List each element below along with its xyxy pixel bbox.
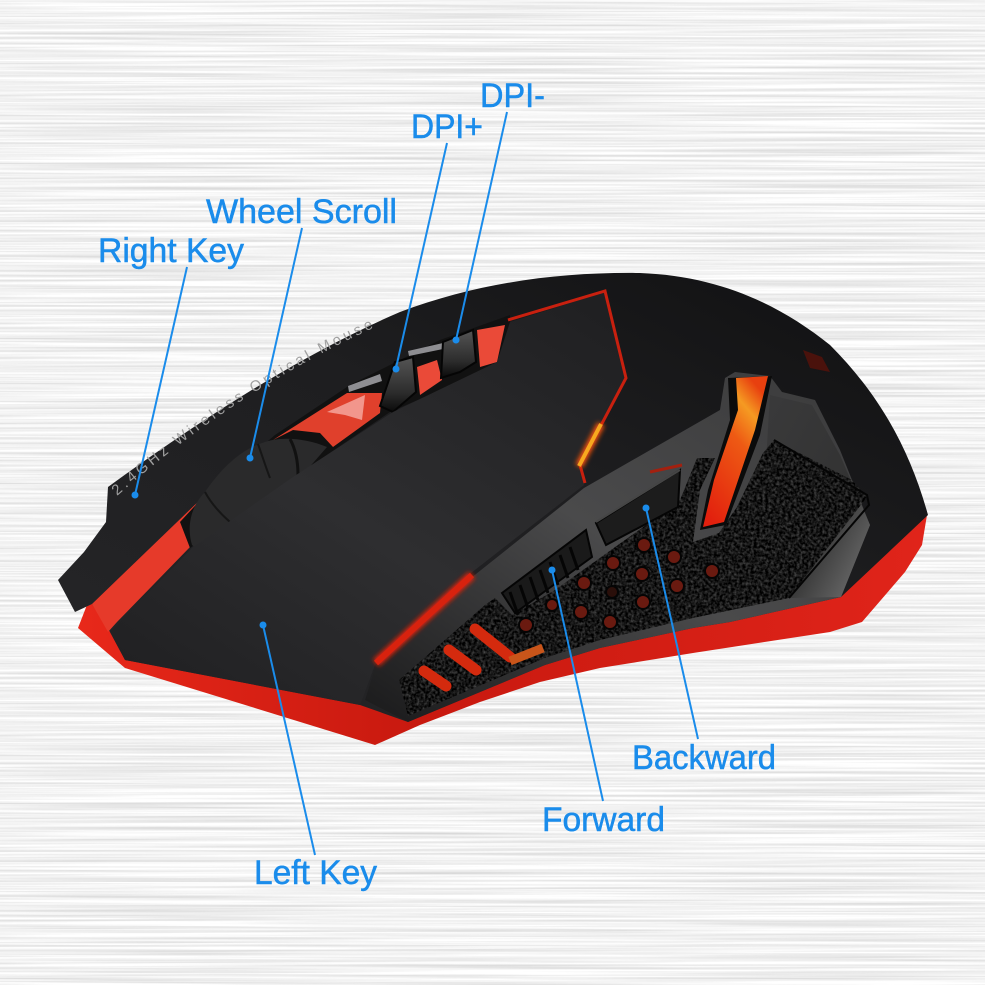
red between buttons 2	[477, 325, 505, 367]
mouse illustration	[58, 272, 928, 745]
backward button	[596, 465, 682, 545]
scroll wheel	[190, 439, 327, 550]
DPI- cap	[408, 343, 443, 356]
red between buttons 1	[417, 360, 442, 395]
callout: Wheel Scroll: Wheel Scroll	[206, 193, 397, 231]
red highlight	[327, 395, 365, 420]
DPI- button	[441, 330, 476, 378]
red front strip	[92, 497, 203, 632]
grip holes	[519, 538, 719, 632]
main LED bar	[703, 376, 768, 527]
red seam	[508, 291, 626, 483]
callout: Forward	[542, 566, 665, 839]
red base	[78, 515, 927, 745]
left key panel	[110, 292, 626, 705]
callout: Wheel Scroll	[206, 193, 397, 462]
DPI+ button	[380, 357, 416, 412]
side LED bars	[424, 629, 543, 686]
callout: Left Key	[254, 622, 377, 892]
forward button	[502, 530, 592, 615]
right grey panel	[760, 395, 870, 598]
callout: Right Key: Right Key	[98, 232, 244, 270]
callout: Left Key: Left Key	[254, 854, 377, 892]
LED bar bezel	[700, 376, 772, 530]
black inner channel	[180, 315, 510, 548]
black body	[58, 273, 928, 722]
red channel behind wheel	[273, 393, 382, 447]
logo mark	[803, 350, 830, 372]
red LED strip	[376, 575, 472, 663]
callout: Right Key	[98, 232, 244, 498]
callout: DPI+: DPI+	[411, 108, 483, 146]
seam glow	[579, 424, 601, 466]
callout: Forward: Forward	[542, 801, 665, 839]
textured side grip	[399, 440, 867, 716]
callout: Backward: Backward	[632, 739, 776, 777]
grip outline	[774, 440, 869, 598]
glossy side band	[365, 372, 870, 722]
DPI+ cap	[348, 374, 382, 392]
callout: DPI-: DPI-	[480, 77, 545, 115]
shell text: 2.4GHz Wireless Optical Mouse	[112, 322, 372, 496]
callout: Backward	[632, 504, 776, 777]
callout: DPI-	[452, 77, 545, 344]
callout: DPI+	[392, 108, 483, 372]
